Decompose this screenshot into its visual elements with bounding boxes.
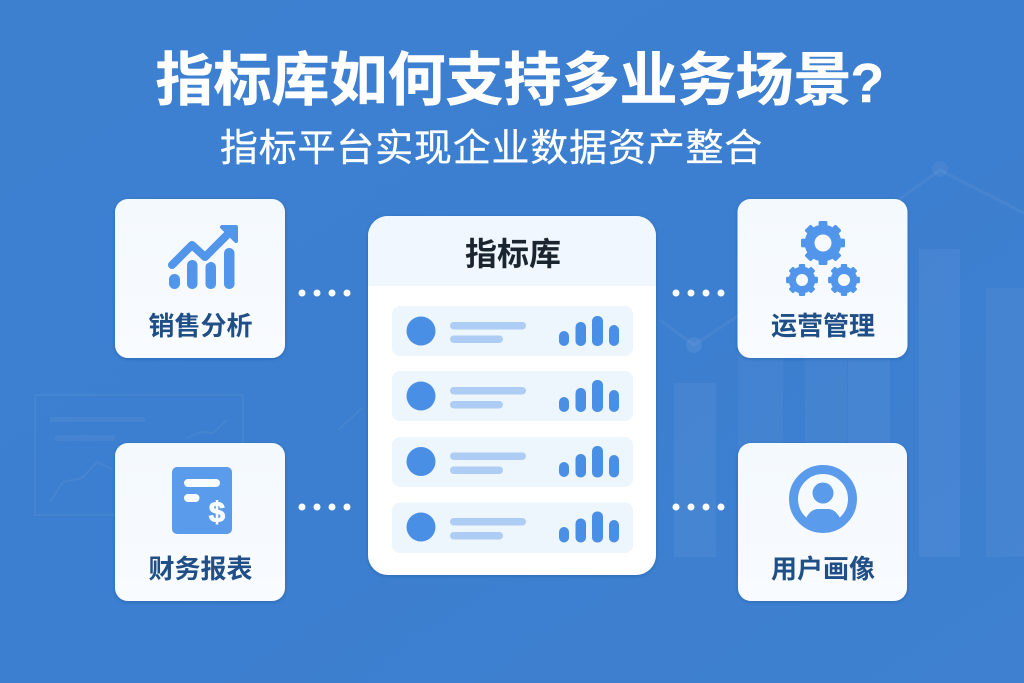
row 1: [392, 306, 633, 356]
panel: sales analysis: [115, 199, 285, 358]
title: ?: [851, 52, 884, 114]
label: 财务报表: [148, 554, 253, 584]
connector dots: user profile: [672, 504, 724, 510]
panel: user profile: [738, 443, 907, 601]
panel: finance report: [115, 443, 285, 601]
icon: gears: [786, 221, 860, 296]
subtitle: 指标平台实现企业数据资产整合: [220, 128, 763, 170]
label: 销售分析: [148, 311, 253, 341]
row 3: [392, 437, 633, 487]
icon: report with dollar: $: [209, 497, 225, 529]
heading: 指标库: [465, 236, 561, 272]
connector dots: operations: [672, 290, 724, 296]
connector dots: sales: [298, 290, 350, 296]
icon: user avatar: [794, 470, 852, 536]
panel: metric library: [368, 216, 656, 575]
panel header: [368, 216, 656, 286]
label: 用户画像: [771, 554, 875, 584]
background: ghost bar chart and trend line: [660, 161, 1024, 557]
connector dots: finance: [298, 504, 350, 510]
row 4: [392, 502, 633, 553]
panel: operations management: [738, 199, 908, 358]
icon: report with dollar: [172, 467, 232, 534]
row 2: [392, 371, 633, 421]
background: ghost report panel: [35, 395, 362, 515]
title: 指标库如何支持多业务场景: [156, 48, 852, 113]
label: 运营管理: [771, 311, 875, 341]
icon: rising bar chart: [169, 227, 236, 289]
